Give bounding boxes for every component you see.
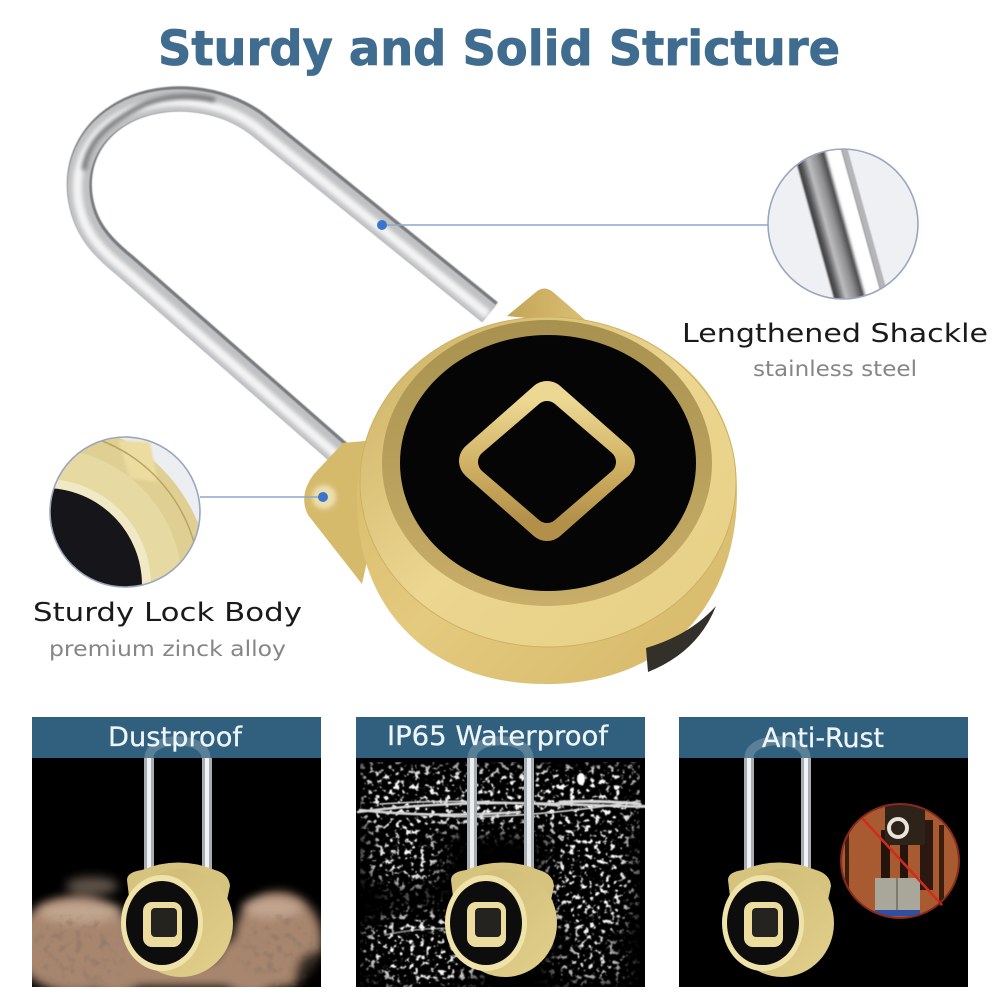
lock ears — [304, 288, 590, 584]
mini lock — [121, 741, 233, 977]
dust cloud — [32, 870, 321, 987]
label: sturdy lock body: Sturdy Lock Body — [33, 598, 302, 628]
fingerprint sensor — [479, 401, 615, 521]
padlock illustration — [77, 97, 737, 684]
water splash — [358, 762, 648, 992]
charging port — [646, 606, 716, 672]
panel photo background — [32, 758, 321, 987]
title: Sturdy and Solid Stricture — [158, 21, 840, 77]
panel heading: Dustproof — [108, 722, 244, 753]
callout: lock body detail circle — [49, 436, 201, 588]
panel photo background — [679, 758, 968, 987]
label: stainless steel: stainless steel — [753, 357, 917, 381]
label: premium zinck alloy: premium zinck alloy — [49, 637, 286, 661]
callout: body connector — [200, 492, 328, 502]
mini lock — [445, 741, 557, 977]
rusty lock warning icon — [841, 804, 959, 918]
panel header — [356, 717, 645, 758]
label: lengthened shackle: Lengthened Shackle — [682, 319, 988, 349]
callout: shackle connector — [377, 220, 768, 230]
panel header — [679, 717, 968, 758]
callout: shackle detail circle — [767, 148, 919, 300]
panel photo background — [356, 758, 645, 987]
lock body back — [357, 320, 737, 684]
panel heading: Anti-Rust — [762, 723, 884, 754]
black face — [400, 335, 696, 591]
panel: anti-rust — [679, 717, 968, 987]
panel header — [32, 717, 321, 758]
panel heading: IP65 Waterproof — [387, 721, 610, 752]
mini lock — [722, 741, 834, 977]
shackle — [77, 97, 490, 458]
body rim — [360, 317, 736, 647]
front gold ring — [382, 320, 712, 606]
panel: dustproof — [32, 717, 321, 987]
panel: waterproof — [356, 717, 648, 992]
